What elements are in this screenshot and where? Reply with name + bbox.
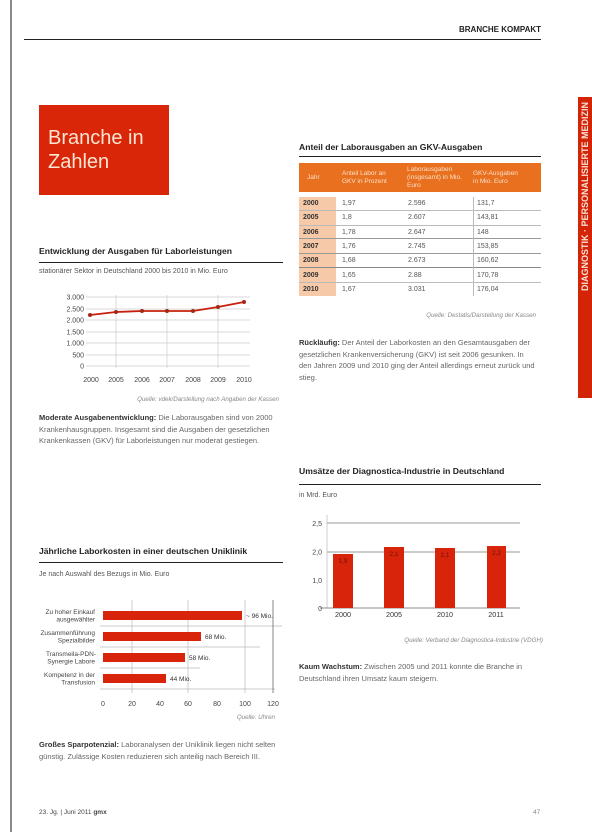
table first column (299, 197, 336, 296)
source: Umsätze: Quelle: Verband der Diagnostica-Industrie (VDGH) (404, 637, 543, 644)
bar chart: Umsätze: 2010 (437, 610, 453, 619)
text: großes Sparpotenzial (39, 740, 275, 761)
line chart: 2005 (108, 377, 124, 384)
table rows: 160,62 (477, 257, 498, 264)
table rows: 2007 (303, 243, 319, 250)
subheading: Diagnostica-Industrie: in Mrd. Euro (299, 492, 337, 499)
table rows: 2009 (303, 272, 319, 279)
table rows: 2.596 (408, 200, 426, 207)
bar chart: Umsätze: 2,1 (389, 551, 399, 558)
table header: GKV-Ausgaben (473, 170, 518, 177)
text: Rückläufig (299, 338, 535, 382)
table header: Euro (407, 182, 421, 189)
line chart: 2006 (134, 377, 150, 384)
line chart: 2010 (236, 377, 252, 384)
side tab: DIAGNOSTIK · PERSONALISIERTE MEDIZIN (580, 102, 590, 291)
subheading: Laborleistungen: stationärer Sektor in Deutschland 2000 bis 2010 in Mio. Euro (39, 268, 228, 275)
bar chart: Umsätze: 0 (318, 606, 322, 613)
bar chart: Laborkosten: Zu hoher Einkauf (45, 609, 95, 616)
bar chart: Laborkosten: 40 (156, 701, 164, 708)
table rows: 148 (477, 229, 489, 236)
source: Laborkosten: Quelle: Uhren (237, 714, 275, 721)
table rows: 2006 (303, 229, 319, 236)
text: Kaum Wachstum: Kaum Wachstum: Zwischen 2005 und 2011 konnte die Branche in (299, 662, 522, 671)
page spine shadow (10, 0, 12, 832)
table rows: 2010 (303, 286, 319, 293)
table rows: 2008 (303, 257, 319, 264)
bar chart: Laborkosten: 60 (184, 701, 192, 708)
table rows: 1,78 (342, 229, 356, 236)
table rows: 1,8 (342, 214, 352, 221)
bar chart: Laborkosten: 58 Mio. (189, 655, 211, 662)
table rows: 170,78 (477, 272, 498, 279)
table rows: 1,76 (342, 243, 356, 250)
table header: Laborausgaben (407, 166, 452, 173)
table: Laborausgaben (299, 163, 541, 296)
line chart: 1.500 (66, 330, 84, 336)
text: Rückläufig: gesetzlichen Krankenversicherung (GKV) ist seit 2006 gesunken. In (299, 350, 524, 359)
bar chart: Laborkosten: 100 (239, 701, 251, 708)
bar chart: Umsätze: 1,0 (312, 578, 322, 585)
text: Rückläufig: Rückläufig: Der Anteil der Laborkosten an den Gesamtausgaben der (299, 338, 530, 347)
bar chart: Umsätze: 2,0 (312, 550, 322, 556)
text: Kaum Wachstum: Deutschland ihren Umsatz kaum steigern. (299, 674, 438, 683)
bar chart: Laborkosten: ~ 96 Mio. (246, 613, 273, 620)
subheading: Laborkosten: Je nach Auswahl des Bezugs in Mio. Euro (39, 571, 169, 578)
table header: in Mio. Euro (473, 178, 508, 185)
title box (39, 105, 169, 195)
bar chart: Laborkosten: 68 Mio. (205, 634, 227, 641)
table rows: 1,97 (342, 200, 356, 207)
line chart: 2007 (159, 377, 175, 384)
title box: Zahlen (48, 150, 109, 172)
text: Rückläufig: den Jahren 2009 und 2010 ging der Anteil allerdings erneut zurück und (299, 361, 535, 370)
line chart: 2.000 (66, 318, 84, 324)
table rows: 3.031 (408, 286, 426, 293)
bar chart: Laborkosten: 20 (128, 701, 136, 708)
text: moderate Ausgabenentwicklung: Krankenhausgruppen. Insgesamt sind die Ausgaben der gesetzlichen (39, 425, 270, 434)
heading: Diagnostica-Industrie: Umsätze der Diagnostica-Industrie in Deutschland (299, 466, 504, 476)
bar chart: Laborkosten: 120 (267, 701, 279, 708)
table rows: 2000 (303, 200, 319, 207)
bar chart: Laborkosten: ausgewählter (56, 616, 96, 624)
bar chart: Umsätze: 2011 (488, 610, 504, 619)
bar chart: Laborkosten: Transmeila-PDN- (46, 651, 96, 658)
line chart (66, 294, 252, 384)
source: table: Quelle: Destatis/Darstellung der Kassen (426, 312, 536, 319)
table rows: 176,04 (477, 286, 498, 293)
table rows: 131,7 (477, 200, 495, 207)
table rows (299, 197, 541, 296)
table rows: 1,67 (342, 286, 356, 293)
bar chart: Umsätze: 2,5 (312, 521, 322, 528)
table rows: 2.88 (408, 272, 422, 279)
table rows: 143,81 (477, 214, 498, 221)
table header: GKV in Prozent (342, 178, 387, 185)
heading: GKV-Ausgaben: Anteil der Laborausgaben an GKV-Ausgaben (299, 142, 482, 152)
bar chart: Umsätze: 1,9 (338, 558, 348, 565)
bar chart: Laborkosten: 0 (101, 701, 105, 708)
table rows: 2.673 (408, 257, 426, 264)
table rows: 153,85 (477, 243, 498, 250)
text: Rückläufig: stieg. (299, 373, 317, 382)
table rows: 2.647 (408, 229, 426, 236)
bar chart: Laborkosten: Transfusion (61, 680, 95, 686)
table rows: 2.745 (408, 243, 426, 250)
side tab (578, 97, 592, 398)
bar chart: Umsätze: 2000 (335, 610, 351, 619)
text: moderate Ausgabenentwicklung: Krankenkassen (GKV) für Laborleistungen nur moderat gestiegen. (39, 436, 259, 445)
table header: (insgesamt) in Mio. (407, 174, 462, 181)
table rows: 1,68 (342, 257, 356, 264)
title box: Branche in (48, 127, 144, 149)
table header: Jahr (307, 174, 320, 181)
bar chart: Laborkosten: Kompetenz in der (44, 672, 96, 679)
line chart: 2000 (83, 377, 99, 384)
table header: Anteil Labor an (342, 170, 386, 177)
heading: Laborleistungen: Entwicklung der Ausgaben für Laborleistungen (39, 246, 232, 256)
bar chart: Umsätze: 2,2 (492, 550, 501, 557)
bar chart: Umsätze: 2,1 (440, 552, 450, 559)
bar chart: Laborkosten: 80 (213, 701, 221, 708)
text: großes Sparpotenzial: günstig. Zulässige Kosten reduzieren sich anteilig nach Bereich III. (39, 752, 260, 761)
bar chart: Umsätze: 2005 (386, 610, 402, 619)
table header (299, 163, 541, 192)
line chart: 500 (72, 352, 84, 360)
text: großes Sparpotenzial: Großes Sparpotenzial: Laboranalysen der Uniklinik liegen nicht selten (39, 740, 275, 749)
line chart: 0 (80, 364, 84, 370)
line chart: 2009 (210, 377, 226, 384)
footer: page number: 47 (533, 809, 540, 816)
bar chart: Laborkosten: Spezialbilder (58, 638, 96, 644)
bar chart: Laborkosten: Synergie Labore (47, 658, 95, 666)
bar chart: Laborkosten: 44 Mio. (170, 676, 192, 683)
line chart: 2008 (185, 377, 201, 384)
table rows: 2005 (303, 214, 319, 221)
line chart: 2.500 (66, 306, 84, 314)
footer: issue line: 23. Jg. | Juni 2011 gmx (39, 809, 107, 816)
table rows: 1,65 (342, 272, 356, 279)
line chart: 3.000 (66, 294, 84, 302)
text: Kaum Wachstum (299, 662, 522, 683)
line chart: 1.000 (66, 340, 84, 348)
source: line chart: Quelle: vdek/Darstellung nach Angaben der Kassen (137, 396, 279, 403)
text: moderate Ausgabenentwicklung: Moderate Ausgabenentwicklung: Die Laborausgaben sind von 2000 (39, 413, 273, 422)
text: moderate Ausgabenentwicklung (39, 413, 273, 445)
heading: Laborkosten: Jährliche Laborkosten in einer deutschen Uniklinik (39, 546, 247, 556)
running header: BRANCHE KOMPAKT (459, 25, 541, 34)
table rows: 2.607 (408, 214, 426, 221)
bar chart: Laborkosten: Zusammenführung (40, 630, 95, 637)
